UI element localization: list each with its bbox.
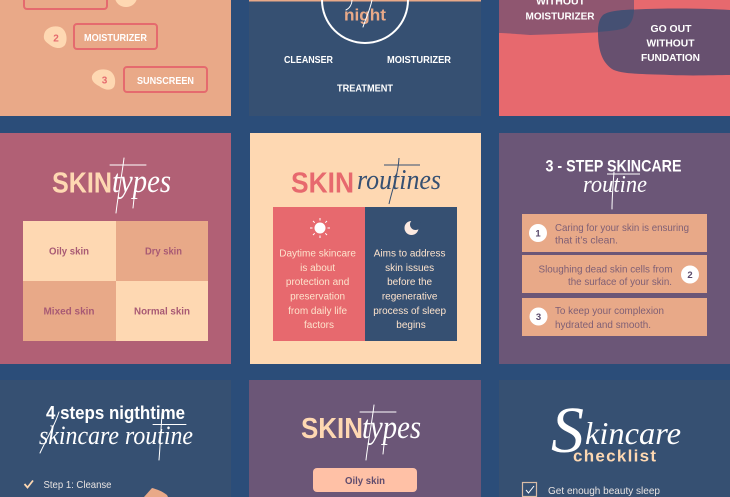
heading: skin types: types	[362, 410, 421, 446]
panel: night routine	[249, 0, 481, 116]
blob: without moisturizer: MOISTURIZER	[526, 10, 595, 22]
panel: don'ts	[499, 0, 730, 116]
step 1 row	[522, 214, 707, 252]
heading: 4 steps nigthtime: 4 steps nigthtime	[46, 403, 185, 423]
text: daytime description: Daytime skincare	[279, 248, 356, 260]
night label	[344, 0, 386, 27]
button: oily skin	[313, 468, 417, 492]
step 3 box: SUNSCREEN	[137, 75, 194, 87]
step 3 badge: 3	[102, 76, 108, 86]
column: nighttime	[365, 207, 457, 341]
grid: mixed skin: Mixed skin	[44, 306, 94, 318]
blob: without foundation: FUNDATION	[641, 52, 700, 64]
panel: 3-step skincare routine	[499, 133, 730, 364]
blob: without foundation: WITHOUT	[646, 38, 695, 50]
step 1: cleanse: Step 1: Cleanse	[44, 479, 112, 491]
blob: without foundation	[598, 8, 730, 75]
column: daytime	[273, 207, 365, 341]
heading: skin types: types	[112, 164, 171, 200]
text: daytime description: from daily life	[288, 306, 348, 317]
heading: 3-step skincare: 3 - STEP SKINCARE	[546, 158, 682, 176]
text: nighttime description: Aims to address	[374, 248, 445, 260]
step 1 badge	[115, 0, 137, 7]
blob: without moisturizer	[499, 0, 634, 35]
step 1 box	[24, 0, 107, 9]
text: nighttime description: before the	[387, 277, 433, 288]
decorative shape: peach arc	[144, 488, 168, 497]
step 2 row	[522, 255, 707, 293]
heading: skin types	[52, 158, 171, 213]
button: oily skin: Oily skin	[345, 475, 385, 487]
text: nighttime description: regenerative	[382, 292, 438, 302]
grid: normal skin: Normal skin	[134, 306, 190, 318]
step 2 badge	[44, 26, 67, 48]
heading: skin types: SKIN	[52, 167, 112, 199]
heading: skin routines	[291, 158, 441, 204]
panel: skincare checklist	[499, 380, 730, 497]
panel: skin types grid	[0, 133, 231, 364]
step 1 row: 1	[535, 228, 541, 240]
icon: sun	[310, 218, 330, 238]
label: cleanser: CLEANSER	[284, 54, 333, 66]
grid: dry skin	[116, 221, 208, 281]
step 3 badge	[92, 69, 115, 90]
checkbox item: beauty sleep	[522, 482, 660, 497]
heading: skin types	[301, 405, 421, 460]
script: routine	[583, 172, 647, 209]
step 2 box: MOISTURIZER	[84, 32, 147, 44]
heading: skin routines: SKIN	[291, 167, 354, 199]
grid: mixed skin	[23, 281, 116, 341]
panel: skincare steps	[0, 0, 231, 116]
step 3 row: To keep your complexion	[555, 305, 664, 317]
panel: skin types list	[249, 380, 481, 497]
text: nighttime description: begins	[396, 320, 426, 331]
panel: 4 steps nighttime routine	[0, 380, 231, 497]
label: moisturizer: MOISTURIZER	[387, 54, 451, 66]
grid: normal skin	[116, 281, 208, 341]
step 3 row: hydrated and smooth.	[555, 319, 651, 331]
night circle	[322, 0, 408, 43]
script: routine: routine	[583, 172, 647, 198]
grid: oily skin	[23, 221, 116, 281]
step 1 row: that it’s clean.	[555, 234, 618, 246]
step 3 row	[522, 298, 707, 336]
subheading: checklist: checklist	[573, 446, 656, 466]
text: nighttime description: skin issues	[385, 263, 434, 274]
script: skincare routine: skincare routine	[39, 421, 193, 450]
night label: night	[344, 6, 386, 24]
step 2 row: 2	[687, 270, 693, 281]
panel: skin routines	[250, 133, 481, 364]
text: nighttime description: process of sleep	[373, 306, 446, 317]
heading: skin types: SKIN	[301, 413, 363, 445]
grid: oily skin: Oily skin	[49, 246, 89, 258]
step 2 badge: 2	[53, 34, 59, 44]
step 3 row: 3	[536, 312, 541, 323]
step 2 box	[74, 24, 157, 49]
checkbox item: beauty sleep: Get enough beauty sleep	[548, 485, 660, 497]
step 2 row: Sloughing dead skin cells from	[538, 264, 673, 276]
script: skincare routine	[39, 412, 193, 460]
step 2 row: the surface of your skin.	[568, 276, 672, 288]
grid: dry skin: Dry skin	[145, 246, 182, 258]
label: treatment: TREATMENT	[337, 82, 394, 94]
text: daytime description: preservation	[290, 292, 345, 302]
heading: skin routines: routines	[357, 165, 441, 196]
step 3 box	[124, 67, 207, 92]
step 1 row: Caring for your skin is ensuring	[555, 222, 689, 234]
text: daytime description: protection and	[286, 277, 349, 288]
blob: without foundation: GO OUT	[650, 23, 692, 35]
text: daytime description: factors	[304, 320, 334, 331]
text: daytime description: is about	[300, 263, 335, 274]
script: skincare: S	[551, 394, 584, 467]
script: skincare: kincare	[585, 415, 681, 451]
icon: moon	[404, 219, 421, 235]
